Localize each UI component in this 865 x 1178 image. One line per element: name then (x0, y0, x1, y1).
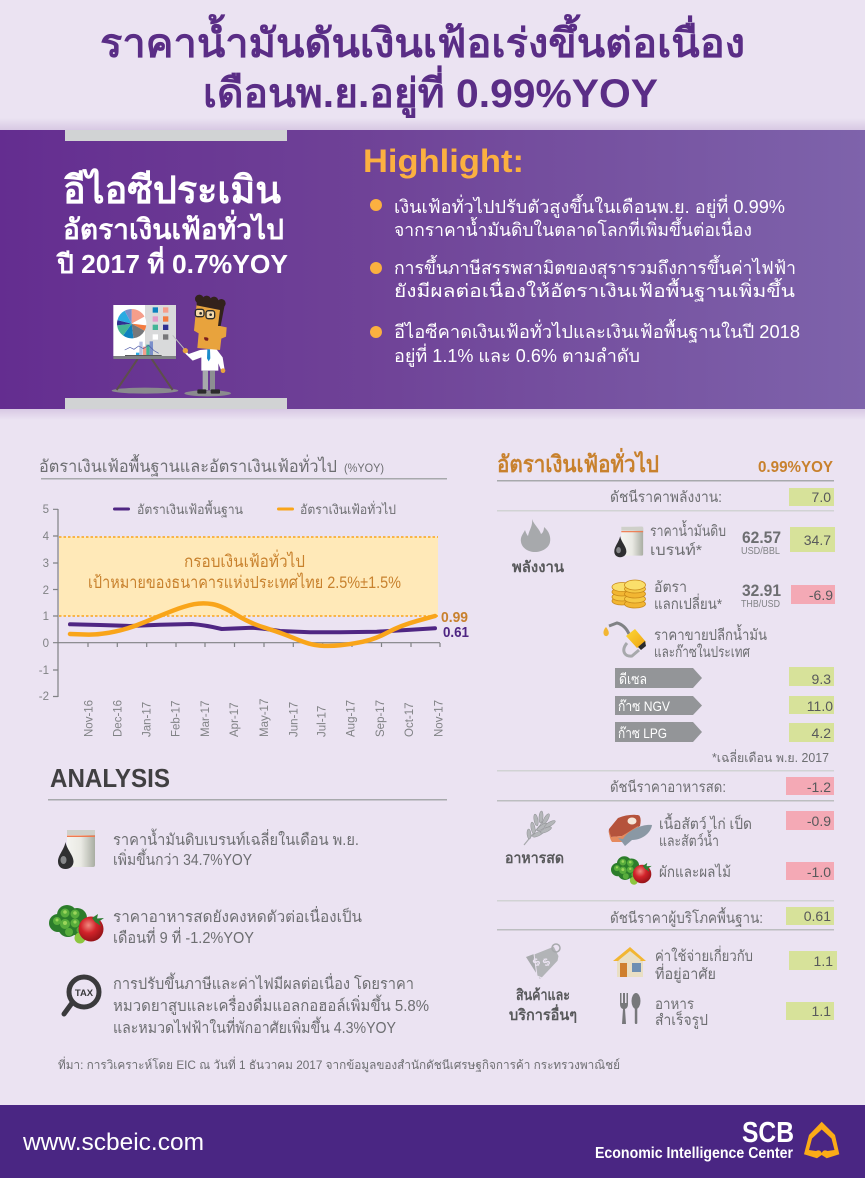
energy index row: 7.0 (812, 489, 831, 505)
highlight item 1 (370, 194, 785, 240)
legend (113, 500, 396, 518)
core CPI row: ดัชนีราคาผู้บริโภคพื้นฐาน: (610, 907, 763, 927)
retail fuel row (603, 623, 767, 661)
housing row: ที่อยู่อาศัย (655, 963, 716, 983)
meat and fish row: เนื้อสัตว์ ไก่ เป็ด (659, 813, 752, 833)
icon: presenter with chart board (112, 295, 231, 396)
icon: price tags: $ (531, 956, 543, 969)
panel: highlight band (0, 118, 865, 420)
analysis text: fresh food: ราคาอาหารสดยังคงหดตัวต่อเนื่องเป็น (113, 906, 362, 926)
icon: fork and spoon (620, 993, 640, 1024)
highlight item 2: การขึ้นภาษีสรรพสามิตของสุรารวมถึงการขึ้นค่าไฟฟ้า (394, 255, 796, 279)
other goods label: บริการอื่นๆ (509, 1004, 577, 1024)
target band: เป้าหมายของธนาคารแห่งประเทศไทย 2.5%±1.5% (88, 572, 401, 592)
analysis text: fresh food (113, 906, 362, 947)
x axis labels: Nov-17 (433, 700, 445, 737)
exchange rate row: แลกเปลี่ยน* (654, 593, 722, 613)
retail fuel row: และก๊าซในประเทศ (654, 643, 750, 661)
fresh food index row (610, 777, 834, 796)
other goods label: สินค้าและ (516, 986, 570, 1004)
x axis labels: Feb-17 (171, 701, 183, 737)
energy index row (610, 488, 834, 506)
y axis labels: 5 (43, 504, 49, 516)
y axis labels (39, 504, 50, 703)
brent row: USD/BBL (741, 546, 780, 557)
y axis labels: -1 (39, 665, 49, 677)
x axis labels: Jan-17 (142, 702, 154, 737)
vegetables and fruit row (611, 856, 834, 885)
analysis text: fresh food: เดือนที่ 9 ที่ -1.2%YOY (113, 927, 254, 947)
LPG row: 4.2 (812, 725, 831, 741)
LPG row: ก๊าซ LPG (618, 725, 667, 741)
analysis text: tax and electricity: และหมวดไฟฟ้าในที่พักอาศัยเพิ่มขึ้น 4.3%YOY (113, 1016, 396, 1037)
SCB wordmark (595, 1117, 794, 1162)
analysis text: oil: ราคาน้ำมันดิบเบรนท์เฉลี่ยในเดือน พ.ย. (113, 828, 359, 849)
end value labels: 0.99 (441, 610, 468, 626)
legend: อัตราเงินเฟ้อพื้นฐาน (137, 500, 243, 518)
icon: coins (612, 580, 646, 608)
highlight item 3: อยู่ที่ 1.1% และ 0.6% ตามลำดับ (394, 343, 640, 367)
icon: flame (521, 519, 550, 552)
target band: กรอบเงินเฟ้อทั่วไป (184, 549, 305, 571)
highlight item 1: เงินเฟ้อทั่วไปปรับตัวสูงขึ้นในเดือนพ.ย. อยู่ที่ 0.99% (394, 194, 785, 218)
core CPI row: 0.61 (804, 908, 831, 924)
icon: vegetables (49, 905, 104, 944)
source note: ที่มา: การวิเคราะห์โดย EIC ณ วันที่ 1 ธันวาคม 2017 จากข้อมูลของสำนักดัชนีเศรษฐกิจการค้า กระทรวงพาณิชย์ (58, 1056, 620, 1073)
title: เดือนพ.ย.อยู่ที่ 0.99%YOY (203, 65, 658, 118)
retail fuel row: ราคาขายปลีกน้ำมัน (654, 624, 767, 644)
footer (0, 1105, 865, 1178)
icon: fuel nozzle (603, 623, 646, 656)
icon: SCB logo (804, 1122, 839, 1158)
icon: price tags (526, 944, 560, 979)
x axis labels: Sep-17 (375, 700, 387, 737)
other goods label (509, 986, 577, 1024)
analysis text: tax and electricity: หมวดยาสูบและเครื่องดื่มแอลกอฮอล์เพิ่มขึ้น 5.8% (113, 994, 429, 1016)
vegetables and fruit row: ผักและผลไม้ (659, 863, 731, 881)
x axis labels: Jun-17 (288, 702, 300, 737)
meat and fish row: -0.9 (807, 813, 831, 829)
diesel row: 9.3 (812, 671, 831, 687)
chart heading: อัตราเงินเฟ้อพื้นฐานและอัตราเงินเฟ้อทั่วไป (39, 454, 337, 477)
analysis text: oil: เพิ่มขึ้นกว่า 34.7%YOY (113, 848, 252, 869)
meat and fish row (609, 811, 834, 850)
analysis heading: ANALYSIS (50, 763, 170, 793)
x axis labels: Dec-16 (112, 700, 124, 737)
EIC forecast heading (56, 168, 288, 279)
chart heading: (%YOY) (344, 461, 384, 475)
table heading: 0.99%YOY (758, 459, 833, 476)
SCB wordmark: SCB (742, 1117, 794, 1149)
exchange rate row: อัตรา (654, 579, 687, 596)
EIC forecast heading: ปี 2017 ที่ 0.7%YOY (56, 245, 288, 279)
table heading: อัตราเงินเฟ้อทั่วไป (497, 447, 659, 477)
table footnote: *เฉลี่ยเดือน พ.ย. 2017 (712, 749, 829, 765)
x axis labels: Aug-17 (346, 700, 358, 737)
icon: tax magnifier (64, 977, 99, 1014)
housing row (613, 945, 837, 983)
x axis labels: Mar-17 (200, 701, 212, 737)
highlight item 2 (370, 255, 796, 302)
panel: analysis (48, 763, 447, 1037)
icon: wheat (524, 811, 556, 845)
NGV row: ก๊าซ NGV (618, 698, 671, 714)
y axis labels: -2 (39, 691, 49, 703)
analysis text: oil (113, 828, 359, 869)
prepared food row (620, 993, 834, 1029)
prepared food row: อาหาร (655, 996, 694, 1013)
line: headline inflation (70, 603, 435, 646)
figure (183, 349, 225, 371)
analysis text: tax and electricity: การปรับขึ้นภาษีและค่าไฟมีผลต่อเนื่อง โดยราคา (113, 972, 414, 993)
legend: อัตราเงินเฟ้อทั่วไป (300, 501, 396, 517)
y axis labels: 3 (43, 558, 49, 570)
EIC forecast heading: อีไอซีประเมิน (63, 168, 281, 212)
NGV row: 11.0 (807, 698, 833, 714)
brent row: 62.57 (742, 528, 781, 547)
brent row (614, 520, 835, 559)
icon: house (613, 947, 646, 977)
prepared food row: สำเร็จรูป (655, 1010, 708, 1029)
y axis labels: 2 (43, 585, 49, 597)
analysis text: tax and electricity (113, 972, 429, 1037)
website: www.scbeic.com (22, 1129, 204, 1156)
icon: price tags: $ (541, 956, 553, 969)
EIC forecast heading: อัตราเงินเฟ้อทั่วไป (63, 209, 284, 245)
highlight heading: Highlight: (363, 143, 524, 179)
x axis labels: Apr-17 (229, 702, 241, 737)
icon: tax magnifier: TAX (75, 988, 94, 999)
title (100, 14, 745, 118)
highlight item 3: อีไอซีคาดเงินเฟ้อทั่วไปและเงินเฟ้อพื้นฐานในปี 2018 (394, 319, 800, 343)
core CPI row (610, 907, 834, 927)
x axis labels: Jul-17 (317, 706, 329, 737)
x axis labels (83, 699, 445, 737)
end value labels (441, 610, 469, 641)
x axis labels: Nov-16 (83, 700, 95, 737)
vegetables and fruit row: -1.0 (807, 864, 831, 880)
prepared food row: 1.1 (812, 1003, 831, 1019)
fresh food index row: -1.2 (807, 779, 831, 795)
y axis labels: 4 (43, 531, 50, 543)
housing row: ค่าใช้จ่ายเกี่ยวกับ (655, 945, 753, 965)
diesel row: ดีเซล (619, 671, 647, 687)
table heading (497, 447, 833, 477)
diesel row (615, 667, 834, 688)
brent row: ราคาน้ำมันดิบ (650, 520, 726, 540)
highlight item 2: ยังมีผลต่อเนื่องให้อัตราเงินเฟ้อพื้นฐานเพิ่มขึ้น (394, 278, 795, 302)
NGV row (615, 696, 834, 715)
panel: inflation line chart (39, 454, 469, 737)
fresh food label: อาหารสด (505, 850, 564, 867)
line: core inflation (70, 624, 435, 632)
y axis labels: 0 (43, 638, 49, 650)
highlight item 3 (370, 319, 800, 367)
y axis labels: 1 (43, 611, 49, 623)
end value labels: 0.61 (443, 625, 469, 641)
highlight item 1: จากราคาน้ำมันดิบในตลาดโลกที่เพิ่มขึ้นต่อเนื่อง (394, 217, 752, 240)
LPG row (615, 722, 834, 742)
chart axes (53, 509, 440, 697)
panel: headline inflation table (497, 447, 837, 1029)
SCB wordmark: Economic Intelligence Center (595, 1145, 793, 1162)
brent row: เบรนท์* (650, 542, 702, 559)
energy label: พลังงาน (512, 559, 565, 576)
exchange rate row (612, 579, 835, 613)
title: ราคาน้ำมันดันเงินเฟ้อเร่งขึ้นต่อเนื่อง (100, 14, 745, 66)
target band (59, 537, 438, 616)
exchange rate row: 32.91 (742, 581, 781, 600)
exchange rate row: THB/USD (741, 599, 780, 610)
icon: oil tank (58, 830, 95, 869)
meat and fish row: และสัตว์น้ำ (659, 830, 719, 850)
icon: meat and fish (609, 815, 652, 846)
x axis labels: May-17 (259, 699, 271, 737)
x axis labels: Oct-17 (404, 702, 416, 737)
exchange rate row: -6.9 (809, 587, 833, 603)
fresh food index row: ดัชนีราคาอาหารสด: (610, 779, 726, 796)
energy index row: ดัชนีราคาพลังงาน: (610, 489, 722, 506)
housing row: 1.1 (814, 953, 833, 969)
brent row: 34.7 (804, 532, 831, 548)
